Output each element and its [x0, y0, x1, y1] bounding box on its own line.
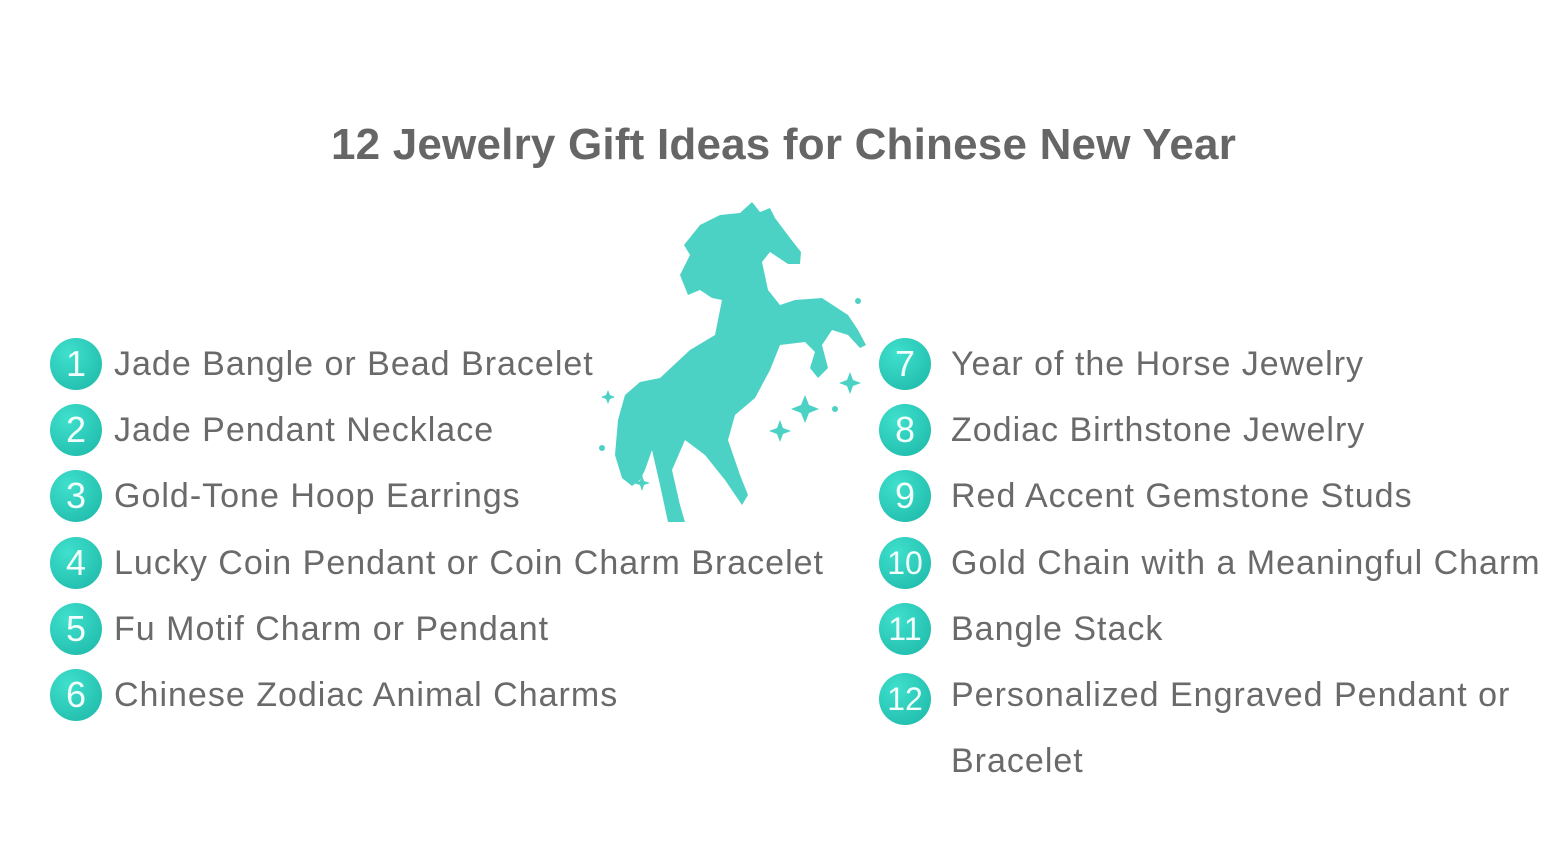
item 1 — [50, 338, 594, 390]
item 7 — [879, 338, 1364, 390]
item 10 — [879, 537, 1541, 589]
item 3: 3 — [66, 475, 86, 516]
item 7: 7 — [895, 343, 915, 384]
item 5: 5 — [66, 608, 86, 649]
item 12: 12 — [887, 680, 923, 716]
item 4: Lucky Coin Pendant or Coin Charm Bracelet — [114, 544, 824, 582]
item 9 — [879, 470, 1413, 522]
item 6: 6 — [66, 674, 86, 715]
item 12 — [879, 673, 1510, 780]
item 1: Jade Bangle or Bead Bracelet — [114, 344, 594, 382]
icon: rearing horse — [599, 202, 866, 522]
item 4 — [50, 537, 824, 589]
item 5 — [50, 603, 549, 655]
item 8: Zodiac Birthstone Jewelry — [951, 410, 1365, 448]
item 1: 1 — [66, 343, 86, 384]
item 8 — [879, 404, 1365, 456]
item 11 — [879, 603, 1163, 655]
item 2: 2 — [66, 409, 86, 450]
item 5: Fu Motif Charm or Pendant — [114, 610, 549, 648]
item 6 — [50, 669, 618, 721]
item 10: 10 — [887, 544, 923, 580]
item 10: Gold Chain with a Meaningful Charm — [951, 544, 1541, 582]
item 11: Bangle Stack — [951, 610, 1163, 648]
text: Bracelet — [951, 742, 1084, 780]
item 3: Gold-Tone Hoop Earrings — [114, 476, 521, 514]
title: 12 Jewelry Gift Ideas for Chinese New Year — [331, 120, 1236, 169]
item 12: Personalized Engraved Pendant or — [951, 676, 1510, 714]
item 7: Year of the Horse Jewelry — [951, 344, 1364, 382]
item 8: 8 — [895, 409, 915, 450]
item 3 — [50, 470, 521, 522]
item 11: 11 — [888, 610, 922, 646]
item 9: Red Accent Gemstone Studs — [951, 476, 1413, 514]
item 6: Chinese Zodiac Animal Charms — [114, 676, 618, 714]
item 2: Jade Pendant Necklace — [114, 410, 494, 448]
item 9: 9 — [895, 475, 915, 516]
item 4: 4 — [66, 542, 86, 583]
item 2 — [50, 404, 494, 456]
